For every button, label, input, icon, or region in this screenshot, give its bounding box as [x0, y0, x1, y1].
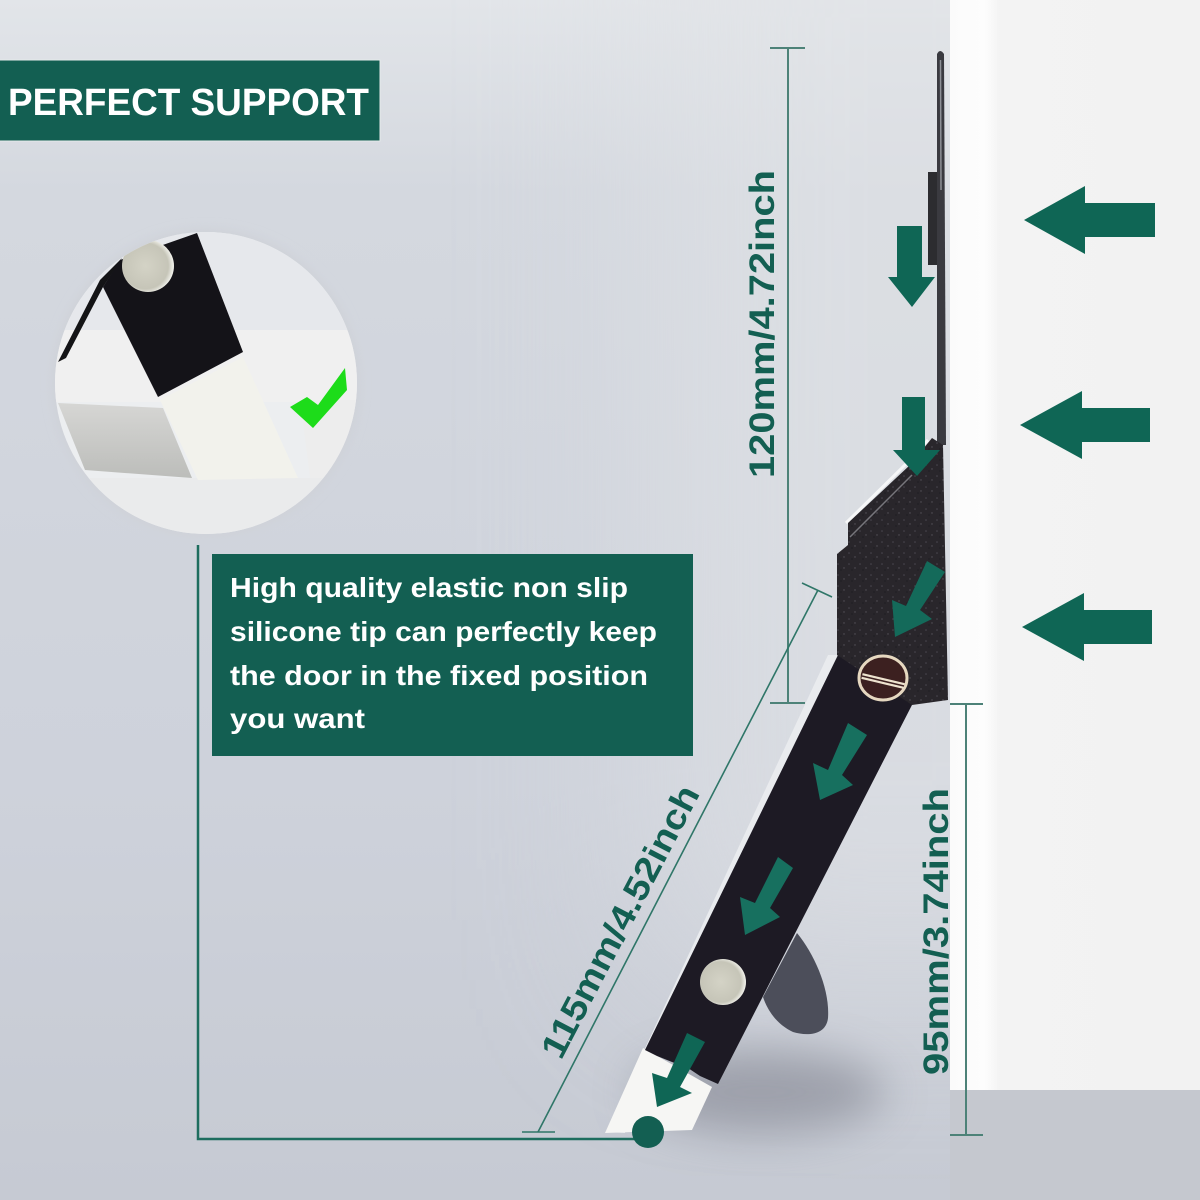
silicone tip	[605, 1048, 712, 1133]
heading: perfect support	[0, 60, 380, 141]
plate inner edge line	[850, 475, 912, 537]
heading: perfect support: PERFECT SUPPORT	[8, 82, 369, 124]
kickstand disc	[763, 933, 828, 1034]
arrow: down onto plate	[893, 397, 940, 476]
callout: silicone tip description: you want	[230, 703, 365, 734]
shadow under door stop	[635, 1050, 885, 1134]
arrow: diagonal on arm middle	[740, 857, 793, 935]
rail clip	[928, 172, 937, 265]
arrow: down on rail	[888, 226, 935, 307]
marker dot at tip	[632, 1116, 664, 1148]
callout: silicone tip description: silicone tip can perfectly keep	[230, 616, 657, 647]
callout: silicone tip description: the door in the fixed position	[230, 660, 648, 691]
arrow: right top	[1024, 186, 1155, 254]
arrow: diagonal at tip	[652, 1033, 705, 1107]
mounting plate	[837, 438, 948, 705]
arrow: diagonal on plate	[892, 561, 945, 637]
light side strip of arm	[606, 655, 838, 1133]
rail highlight	[940, 60, 942, 190]
icon: green check mark	[290, 368, 347, 428]
background: wall and floor	[950, 0, 1200, 1200]
dimension: 95mm / 3.74inch: 95mm/3.74inch	[917, 788, 956, 1075]
silver screw	[700, 959, 746, 1005]
dimension: 115mm / 4.52inch	[522, 583, 832, 1132]
callout: silicone tip description: High quality elastic non slip	[230, 572, 628, 603]
black arm	[645, 655, 913, 1084]
dimension: 115mm / 4.52inch: 115mm/4.52inch	[534, 779, 708, 1065]
arrow: right bottom	[1022, 593, 1152, 661]
callout: silicone tip description	[212, 554, 693, 756]
plate top edge highlight	[846, 440, 928, 523]
arrow: diagonal on arm upper	[813, 723, 867, 800]
dimension: 120mm / 4.72inch: 120mm/4.72inch	[743, 170, 782, 478]
door stop product	[605, 51, 948, 1133]
gold slotted screw	[859, 656, 907, 700]
leader line from inset to tip	[198, 545, 648, 1139]
mounting rail	[937, 51, 946, 445]
arrow: right middle	[1020, 391, 1150, 459]
inset: silicone tip close-up	[52, 229, 360, 538]
